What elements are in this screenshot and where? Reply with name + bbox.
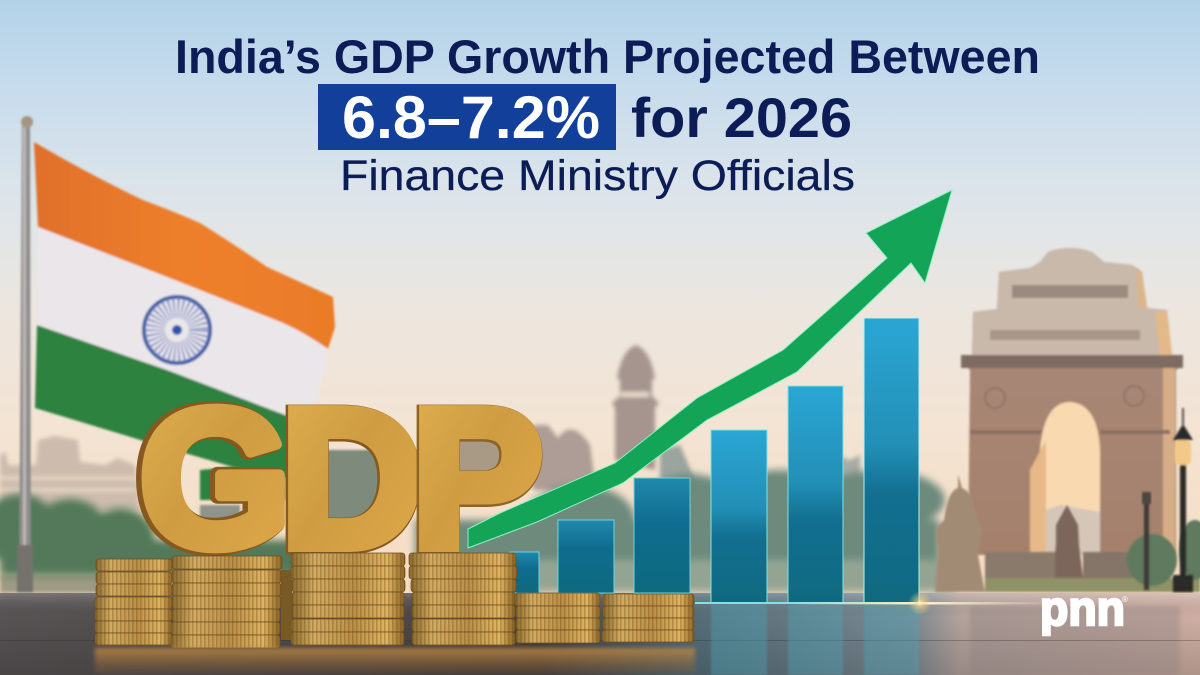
monument: left chhatri — [935, 474, 985, 592]
coin stack 2 — [171, 556, 282, 648]
street lamps — [1142, 408, 1193, 592]
coin reflections — [95, 648, 695, 675]
bar 2 — [558, 520, 614, 593]
flag: green band — [35, 325, 300, 480]
flag: saffron band — [34, 142, 335, 349]
bar 3 — [634, 478, 690, 593]
coin stack 3 — [291, 553, 405, 645]
bar 1 — [510, 552, 539, 593]
logo: pnn: ® — [1122, 595, 1128, 604]
lamp: small — [1142, 492, 1151, 590]
flag: white band — [37, 227, 328, 417]
bar 6 — [864, 318, 919, 603]
backdrop seen through letter counters — [200, 440, 505, 535]
tree line left — [0, 494, 300, 576]
blurred city skyline left — [0, 436, 300, 593]
letter: G: G — [139, 369, 291, 588]
letter: D: D — [280, 370, 422, 589]
monument: centre chhatri — [1052, 505, 1083, 578]
title line 1: India’s GDP Growth Projected Between — [175, 30, 1040, 83]
flag pole — [17, 116, 33, 592]
letter: D: D — [281, 369, 423, 588]
coin stack filler — [281, 570, 292, 640]
highlight box: 6.8–7.2% — [342, 84, 600, 151]
letter: G: G — [136, 369, 288, 588]
coin stacks — [95, 553, 695, 675]
bar 4 — [711, 430, 767, 603]
bar reflections — [711, 604, 919, 675]
subtitle: Finance Ministry Officials — [340, 152, 855, 200]
coin stack 1 — [95, 559, 172, 645]
title line 2: for 2026 — [631, 86, 852, 149]
GDP gold letters — [136, 369, 543, 589]
growth arrow — [468, 190, 952, 548]
Indian flag — [34, 142, 335, 480]
monuments near India Gate — [935, 474, 1200, 592]
coin stack 4 — [409, 553, 517, 645]
tree line centre — [415, 470, 955, 592]
bar 5 — [788, 386, 843, 603]
flag: chakra — [144, 297, 210, 363]
light flare — [695, 591, 1060, 615]
lamp: tall right — [1173, 408, 1193, 592]
letter: P: P — [411, 370, 542, 589]
India Gate — [961, 248, 1183, 555]
title — [175, 30, 1040, 200]
letter: P: P — [412, 369, 543, 588]
bar chart — [510, 318, 919, 675]
coin stack 5 — [515, 593, 600, 643]
coin stack 6 — [602, 594, 694, 642]
blurred city skyline centre — [533, 345, 860, 490]
logo: pnn: pnn — [1040, 583, 1125, 636]
wet floor — [0, 593, 1200, 675]
